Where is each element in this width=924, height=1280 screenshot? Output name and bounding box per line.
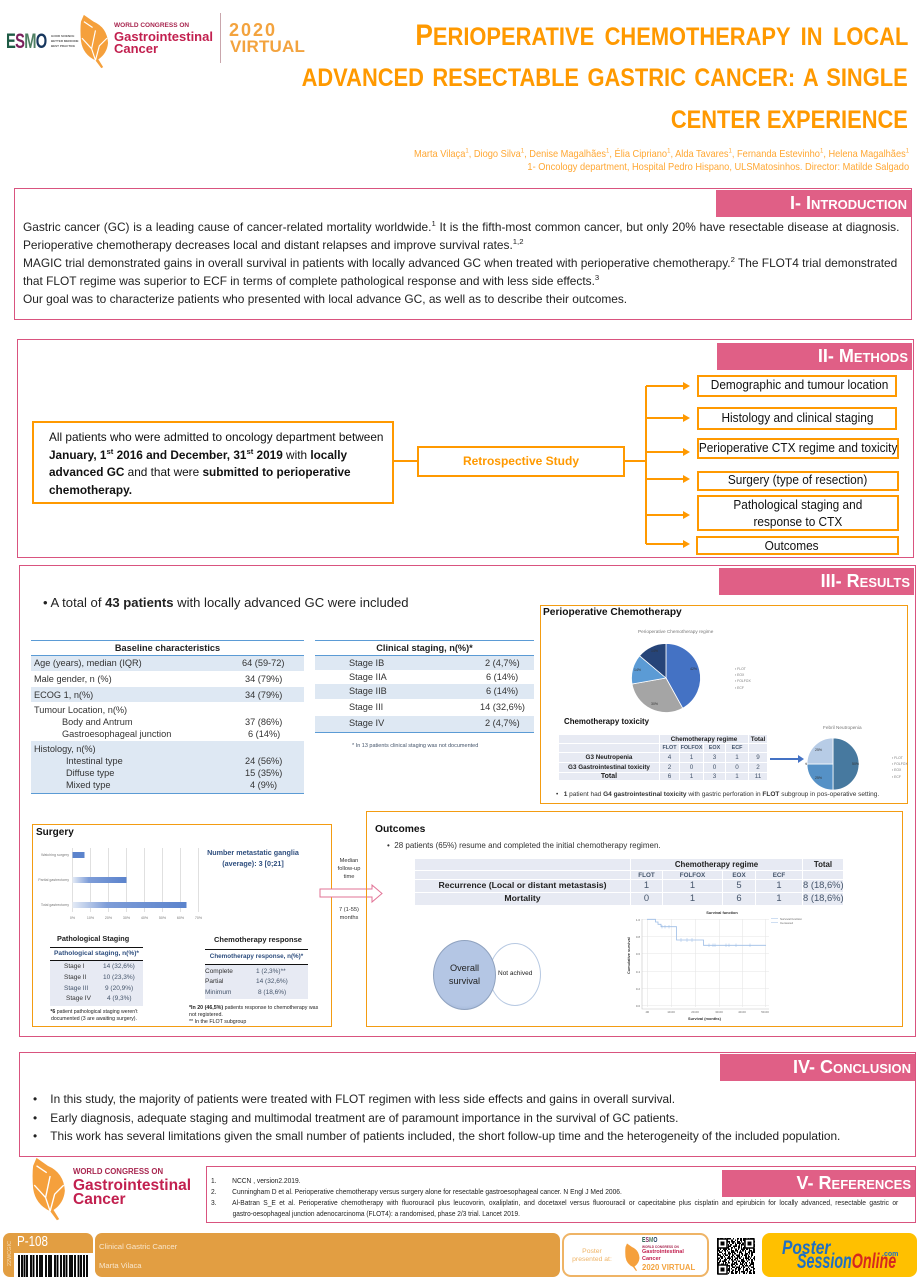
line chart: survival function: 1.0: [636, 918, 640, 922]
table: baseline characteristics: Baseline characteristics: [115, 643, 220, 653]
box: surgery: Surgery (type of resection): [728, 472, 868, 487]
table: outcomes by regime: Total: [814, 860, 832, 869]
footer: poster id and barcode: 22WCGIC: [7, 1241, 13, 1266]
logo: World Congress on Gastrointestinal Cancer: [80, 14, 213, 68]
text box: study population: January, 1st 2016 and December, 31st 2019 with locally: [49, 447, 347, 462]
table: outcomes by regime: [415, 859, 844, 905]
table: baseline characteristics: Histology, n(%): [34, 744, 96, 754]
legend: regime pie: [735, 667, 751, 690]
line chart: survival function: Survival function: [706, 910, 738, 915]
table: toxicity: 0: [713, 764, 716, 771]
table: toxicity: 0: [735, 764, 739, 771]
legend: regime pie: ▪ FLOT: [735, 667, 746, 671]
box: retrospective study: [417, 446, 625, 477]
arrow: surgery to outcomes: [320, 884, 383, 903]
table: baseline characteristics: 34 (79%): [245, 690, 282, 700]
pie chart: chemotherapy regime: 42%: [690, 667, 697, 671]
legend: regime pie: ▪ ECF: [735, 686, 744, 690]
table: baseline characteristics: Body and Antrum: [62, 717, 132, 727]
text: introduction: Perioperative chemotherapy decreases local and distant relapses and improve survival rates.1,2: [23, 237, 524, 252]
heading: results: III- Results: [821, 571, 910, 591]
text box: study population: [32, 421, 394, 504]
line chart: survival function: 50.00: [761, 1010, 769, 1014]
pie chart: chemotherapy regime: [632, 644, 700, 712]
table: toxicity: 4: [668, 754, 671, 761]
table: toxicity: ECF: [732, 745, 742, 751]
table: toxicity: Chemotherapy regime: [671, 736, 737, 743]
table: toxicity: G3 Gastrointestinal toxicity: [568, 764, 650, 771]
table: chemotherapy response: Partial: [205, 978, 223, 985]
logo: footer congress: Cancer: [73, 1191, 126, 1208]
footer: poster presented at: Cancer: [642, 1256, 661, 1262]
footer: PosterSessionOnline logo: .com: [882, 1251, 898, 1258]
footer: poster id and barcode: [3, 1233, 93, 1277]
logo: World Congress on Gastrointestinal Cancer: WORLD CONGRESS ON: [114, 22, 189, 29]
label: follow-up months: months: [340, 915, 358, 921]
bar chart: type of surgery: 30%: [123, 916, 131, 920]
heading: methods: [717, 343, 912, 370]
heading: references: V- References: [797, 1173, 911, 1193]
panel: outcomes: [366, 811, 903, 1027]
table: chemotherapy response: 14 (32,6%): [256, 978, 288, 985]
footer: poster presented at: ESMO: [642, 1237, 657, 1244]
box: retrospective study: Retrospective Study: [463, 454, 579, 468]
note: chemotherapy response: [189, 1005, 318, 1025]
panel: references: [206, 1166, 916, 1223]
bar chart: type of surgery: 20%: [105, 916, 113, 920]
table: toxicity: 2: [668, 764, 671, 771]
table: pathological staging: 10 (23,3%): [103, 974, 135, 981]
table: pathological staging: 4 (9,3%): [107, 995, 132, 1002]
table: pathological staging: 9 (20,9%): [105, 985, 133, 992]
legend: febrile neutropenia: ▪ FOLFOX: [892, 762, 908, 766]
table: toxicity: 3: [713, 754, 716, 761]
footer: poster id and barcode: P-108: [17, 1234, 48, 1250]
title: CENTER EXPERIENCE: [671, 106, 908, 134]
text: references list: [211, 1176, 898, 1218]
bar chart: type of surgery: Partial gastrectomy: [38, 878, 69, 882]
callout: metastatic ganglia: (average): 3 [0;21]: [222, 858, 284, 868]
footer: PosterSessionOnline logo: Poster: [782, 1238, 830, 1259]
authors and affiliation: [414, 148, 909, 172]
pie chart: chemotherapy regime: 30%: [651, 702, 658, 706]
table: baseline characteristics: 24 (56%): [245, 756, 282, 766]
chart title: regime pie: Perioperative Chemotherapy regime: [638, 629, 713, 634]
line chart: survival function: Cumulative survival: [626, 937, 631, 974]
logo: 2020 Virtual: 2020: [229, 20, 277, 40]
table: clinical staging: Stage IV: [349, 718, 384, 728]
table: toxicity: 9: [756, 754, 760, 761]
table: toxicity: 3: [713, 773, 716, 780]
title: [302, 19, 908, 134]
logo: ESMO: GOOD SCIENCE: [51, 34, 74, 38]
footer: category and author bar: Marta Vilaca: [99, 1261, 142, 1270]
line chart: survival function: 20.00: [691, 1010, 699, 1014]
pie chart: febrile neutropenia: 25%: [815, 748, 822, 752]
bar chart: type of surgery: 50%: [159, 916, 167, 920]
table: outcomes by regime: 1: [690, 892, 695, 903]
table: chemotherapy response: Complete: [205, 968, 233, 975]
box: CTX: Perioperative CTX regime and toxicity: [699, 440, 897, 455]
table: outcomes by regime: ECF: [773, 872, 785, 879]
text: references list: Al-Batran S_E et al. Perioperative chemotherapy with fluorouracil plus leucovorin, oxaliplatin, and docetaxel versus fluorouracil or capecitabine plus cisplatin and epirubicin for locally advanced, resectable gastric or: [232, 1198, 898, 1207]
callout: metastatic ganglia: [207, 848, 299, 868]
table: outcomes by regime: Chemotherapy regime: [675, 860, 758, 869]
legend: febrile neutropenia: ▪ EOX: [892, 768, 901, 772]
label: follow-up months: [339, 907, 359, 921]
line chart: survival function: 30.00: [715, 1010, 723, 1014]
diagram: overall survival: Not achived: [498, 970, 532, 977]
table: clinical staging: [315, 640, 534, 733]
authors and affiliation: 1- Oncology department, Hospital Pedro Hispano, ULSMatosinhos. Director: Matilde Salgado: [527, 162, 909, 172]
logo: ESMO: [6, 30, 79, 53]
heading: conclusion: IV- Conclusion: [793, 1057, 911, 1077]
pie chart: chemotherapy regime: 14%: [634, 668, 641, 672]
table: clinical staging: 6 (14%): [486, 686, 518, 696]
table: outcomes by regime: EOX: [732, 872, 746, 879]
label: median follow-up: time: [344, 874, 354, 880]
table: pathological staging: Stage I: [64, 963, 85, 970]
table: baseline characteristics: [31, 640, 304, 794]
footer: category and author bar: Clinical Gastric Cancer: [99, 1242, 177, 1251]
heading: outcomes: Outcomes: [375, 824, 425, 835]
bar chart: type of surgery: Watching surgery: [41, 853, 69, 857]
text: conclusion bullets: • Early diagnosis, adequate staging and multimodal treatment are of paramount importance in the survival of GC patients.: [33, 1111, 678, 1125]
footer: poster presented at: WORLD CONGRESS ON: [642, 1245, 679, 1249]
note: clinical staging: * In 13 patients clinical staging was not documented: [352, 743, 478, 749]
line chart: survival function: 0.4: [636, 970, 640, 974]
logo: World Congress on Gastrointestinal Cancer: Cancer: [114, 41, 158, 56]
table: clinical staging: 2 (4,7%): [485, 658, 520, 668]
footer: QR code: [717, 1238, 755, 1275]
text: conclusion bullets: • This work has several limitations given the small number of patients included, the short follow-up time and the heterogeneity of the included population.: [33, 1129, 840, 1143]
panel: methods: [17, 339, 914, 558]
table: chemotherapy response: 8 (18,6%): [258, 989, 286, 996]
table: toxicity: 1: [735, 754, 739, 761]
logo: 2020 Virtual: [220, 13, 305, 63]
table: clinical staging: Stage III: [349, 702, 383, 712]
footer: category and author bar: [95, 1233, 560, 1277]
heading: references: [722, 1170, 915, 1197]
legend: febrile neutropenia: [892, 756, 908, 779]
pie chart: febrile neutropenia: 25%: [815, 776, 822, 780]
table: chemotherapy response: Minimum: [205, 989, 231, 996]
box: histology: [697, 407, 897, 430]
callout: metastatic ganglia: Number metastatic ganglia: [207, 848, 299, 857]
logo: footer congress: WORLD CONGRESS ON: [73, 1167, 163, 1176]
table: baseline characteristics: Intestinal type: [66, 756, 123, 766]
diagram: overall survival: [433, 940, 541, 1010]
heading: chemotherapy toxicity: Chemotherapy toxicity: [564, 717, 649, 726]
table: outcomes by regime: 6: [736, 892, 742, 903]
panel: surgery: [32, 824, 332, 1027]
text box: study population: chemotherapy.: [49, 483, 132, 497]
table: outcomes by regime: 1: [776, 879, 782, 890]
table: outcomes by regime: 8 (18,6%): [803, 892, 844, 903]
text: completed regimen: • 28 patients (65%) resume and completed the initial chemotherapy regimen.: [387, 841, 661, 850]
table: baseline characteristics: ECOG 1, n(%): [34, 690, 93, 700]
table: outcomes by regime: FOLFOX: [680, 872, 705, 879]
table: toxicity: 1: [735, 773, 739, 780]
logo: World Congress on Gastrointestinal Cancer: Gastrointestinal: [114, 29, 213, 44]
text: references list: Cunningham D et al. Perioperative chemotherapy versus surgery alone for resectable gastroesophageal cancer. N Engl J Med 2006.: [232, 1187, 622, 1196]
box: surgery: [697, 471, 899, 491]
line chart: survival function: 40.00: [738, 1010, 746, 1014]
footer: PosterSessionOnline logo: [762, 1233, 917, 1277]
box: demographic: [697, 375, 897, 397]
legend: regime pie: ▪ FOLFOX: [735, 679, 751, 683]
table: baseline characteristics: 37 (86%): [245, 717, 282, 727]
text: references list: 2.: [211, 1187, 217, 1196]
text: introduction: that FLOT regime was superior to ECF in terms of complete pathological response and with less side effects.3: [23, 273, 599, 288]
line chart: survival function: Censored: [780, 921, 793, 925]
text: introduction: MAGIC trial demonstrated gains in overall survival in patients with locally advanced GC when treated with perioperative chemotherapy.2 The FLOT4 trial demonstrated: [23, 255, 897, 270]
line chart: survival function: [626, 910, 802, 1021]
heading: perioperative chemotherapy: Perioperative Chemotherapy: [543, 607, 682, 618]
chart title: febrile neutropenia: Febril Neutropenia: [823, 725, 862, 730]
connectors: methods flow: [394, 382, 690, 548]
note: chemotherapy response: not registered.: [189, 1012, 223, 1018]
note: chemotherapy response: *In 20 (46,5%) patients response to chemotherapy was: [189, 1005, 318, 1011]
table: pathological staging: 14 (32,6%): [103, 963, 135, 970]
table: clinical staging: 6 (14%): [486, 672, 518, 682]
heading: introduction: I- Introduction: [790, 193, 907, 213]
legend: regime pie: ▪ EOX: [735, 673, 744, 677]
label: follow-up months: 7 (1-55): [339, 907, 359, 913]
table: toxicity: G3 Neutropenia: [586, 754, 632, 761]
table: clinical staging: Clinical staging, n(%)*: [376, 643, 473, 653]
logo: footer congress: [32, 1158, 191, 1220]
title: PERIOPERATIVE CHEMOTHERAPY IN LOCAL: [415, 19, 908, 52]
table: clinical staging: Stage IIB: [349, 686, 387, 696]
table: toxicity: 1: [690, 773, 693, 780]
box: pathological staging: response to CTX: [754, 514, 842, 529]
text: conclusion bullets: • In this study, the majority of patients were treated with FLOT regimen with less side effects and gains in overall survival.: [33, 1092, 675, 1106]
label: median follow-up: follow-up: [338, 866, 360, 872]
table: chemotherapy response: 1 (2,3%)**: [256, 968, 286, 975]
arrow: toxicity to pie: [770, 755, 804, 763]
table: baseline characteristics: Age (years), median (IQR): [34, 658, 142, 668]
logo: ESMO: BEST PRACTICE: [51, 44, 75, 48]
table: outcomes by regime: FLOT: [638, 872, 655, 879]
table: clinical staging: 2 (4,7%): [485, 718, 520, 728]
table: baseline characteristics: 34 (79%): [245, 674, 282, 684]
title: ADVANCED RESECTABLE GASTRIC CANCER: A SINGLE: [302, 64, 908, 92]
text box: study population: advanced GC and that were submitted to perioperative: [49, 465, 351, 479]
table: baseline characteristics: 6 (14%): [248, 729, 280, 739]
panel: conclusion: [19, 1052, 916, 1157]
footer: poster presented at: [562, 1233, 709, 1277]
table: baseline characteristics: Tumour Location, n(%): [34, 705, 127, 715]
box: outcomes: [696, 536, 899, 555]
text box: study population: All patients who were admitted to oncology department between: [49, 430, 383, 444]
table: baseline characteristics: Diffuse type: [66, 768, 114, 778]
table: outcomes by regime: 1: [776, 892, 782, 903]
table: outcomes by regime: 8 (18,6%): [803, 879, 844, 890]
bar chart: type of surgery: Total gastrectomy: [41, 903, 69, 907]
bar chart: type of surgery: 70%: [195, 916, 203, 920]
table: pathological staging: Stage III: [64, 985, 88, 992]
diagram: overall survival: Overall: [450, 963, 479, 973]
legend: febrile neutropenia: ▪ ECF: [892, 775, 901, 779]
footer: poster presented at: Poster: [582, 1248, 602, 1255]
label: median follow-up: [338, 858, 360, 880]
table: chemotherapy response: Chemotherapy response, n(%)*: [210, 953, 303, 960]
box: demographic: Demographic and tumour location: [711, 377, 888, 392]
table: pathological staging: Pathological staging, n(%)*: [54, 950, 139, 957]
text: total patients: • A total of 43 patients with locally advanced GC were included: [43, 595, 409, 610]
table: toxicity: 0: [690, 764, 693, 771]
line chart: survival function: 0.8: [636, 935, 640, 939]
heading: conclusion: [720, 1054, 915, 1081]
table: outcomes by regime: Recurrence (Local or distant metastasis): [438, 880, 606, 890]
table: baseline characteristics: Gastroesophageal junction: [62, 729, 171, 739]
text: introduction: Our goal was to characterize patients who presented with local advance GC, as well as to describe their outcomes.: [23, 292, 627, 306]
logo: 2020 Virtual: VIRTUAL: [230, 37, 305, 56]
table: toxicity: 6: [668, 773, 671, 780]
footer: poster presented at: Gastrointestinal: [642, 1249, 684, 1255]
table: baseline characteristics: Male gender, n (%): [34, 674, 112, 684]
box: outcomes: Outcomes: [765, 538, 819, 553]
text: references list: 1.: [211, 1176, 217, 1185]
table: toxicity: Total: [751, 736, 765, 743]
text: references list: 3.: [211, 1198, 217, 1207]
authors and affiliation: Marta Vilaça1, Diogo Silva1, Denise Magalhães1, Élia Cipriano1, Alda Tavares1, Fernanda Estevinho1, Helena Magalhães1: [414, 148, 909, 160]
legend: febrile neutropenia: ▪ FLOT: [892, 756, 903, 760]
footer: PosterSessionOnline logo: SessionOnline: [797, 1250, 896, 1273]
bar chart: type of surgery: 10%: [87, 916, 95, 920]
table: toxicity: EOX: [709, 745, 720, 751]
logo: ESMO: BETTER MEDICINE: [51, 39, 79, 43]
footer: poster presented at: 2020 VIRTUAL: [642, 1263, 695, 1272]
box: histology: Histology and clinical staging: [721, 410, 873, 425]
heading: results: [719, 568, 914, 595]
note: G4 toxicity: • 1 patient had G4 gastrointestinal toxicity with gastric perforation in FLOT subgroup in pos-operative setting.: [556, 791, 879, 798]
table: pathological staging: Stage IV: [66, 995, 91, 1002]
text: references list: NCCN , version2.2019.: [232, 1176, 301, 1185]
table: outcomes by regime: 5: [736, 879, 742, 890]
table: pathological staging: [50, 947, 143, 1006]
table: clinical staging: Stage IB: [349, 658, 384, 668]
line chart: survival function: Survival function: [780, 917, 802, 921]
line chart: survival function: 0.0: [636, 1004, 640, 1008]
line chart: survival function: 10.00: [667, 1010, 675, 1014]
heading: chemotherapy response: Chemotherapy response: [214, 935, 302, 944]
heading: surgery: Surgery: [36, 827, 74, 838]
note: chemotherapy response: ** In the FLOT subgroup: [189, 1019, 246, 1025]
table: toxicity: 1: [690, 754, 693, 761]
text: references list: gastro-oesophageal junction adenocarcinoma (FLOT4): a randomised, phase 2/3 trial. Lancet 2019.: [232, 1209, 520, 1218]
table: baseline characteristics: 15 (35%): [245, 768, 282, 778]
table: clinical staging: 14 (32,6%): [480, 702, 525, 712]
heading: pathological staging: Pathological Staging: [57, 934, 129, 943]
table: outcomes by regime: 1: [644, 879, 649, 890]
bar chart: type of surgery: [38, 848, 203, 920]
table: baseline characteristics: Mixed type: [66, 780, 110, 790]
table: toxicity: 2: [756, 764, 760, 771]
diagram: overall survival: survival: [449, 976, 480, 986]
box: pathological staging: [697, 495, 899, 531]
text: introduction: [23, 219, 899, 306]
panel: perioperative chemotherapy: [540, 605, 908, 804]
note: pathological staging: [50, 1009, 138, 1022]
table: clinical staging: Stage IIA: [349, 672, 387, 682]
box: pathological staging: Pathological staging and: [734, 497, 862, 512]
label: median follow-up: Median: [340, 858, 358, 864]
table: outcomes by regime: 0: [644, 892, 649, 903]
pie chart: febrile neutropenia: [805, 738, 859, 790]
heading: methods: II- Methods: [818, 346, 908, 366]
line chart: survival function: 0.2: [636, 987, 640, 991]
table: pathological staging: Stage II: [64, 974, 86, 981]
logo: ESMO: ESMO: [6, 30, 47, 53]
bar chart: type of surgery: 60%: [177, 916, 185, 920]
footer: poster presented at: presented at:: [572, 1256, 612, 1263]
table: baseline characteristics: 4 (9%): [250, 780, 277, 790]
table: outcomes by regime: 1: [690, 879, 695, 890]
table: baseline characteristics: 64 (59-72): [242, 658, 284, 668]
table: chemotherapy response: [205, 949, 308, 999]
note: pathological staging: *6 patient pathological staging weren't: [50, 1009, 138, 1015]
bar chart: type of surgery: 40%: [141, 916, 149, 920]
line chart: survival function: 0.6: [636, 952, 640, 956]
pie chart: chemotherapy regime: 14%: [651, 649, 658, 653]
table: toxicity: FOLFOX: [681, 745, 702, 751]
line chart: survival function: Survival (months): [688, 1016, 722, 1021]
panel: introduction: [14, 188, 912, 320]
text: conclusion bullets: [33, 1092, 840, 1143]
bar chart: type of surgery: 0%: [70, 916, 76, 920]
line chart: survival function: .00: [645, 1010, 649, 1014]
table: outcomes by regime: Mortality: [504, 893, 541, 903]
table: toxicity: 11: [755, 773, 761, 780]
table: toxicity: [559, 735, 767, 780]
panel: results: [19, 565, 916, 1037]
note: pathological staging: documented (3 are awaiting surgery).: [51, 1016, 137, 1022]
text: introduction: Gastric cancer (GC) is a leading cause of cancer-related mortality worldwide.1 It is the fifth-most common cancer, but only 20% have resectable disease at diagnosis.: [23, 219, 899, 234]
pie chart: febrile neutropenia: 50%: [852, 762, 859, 766]
table: toxicity: Total: [601, 773, 617, 780]
table: toxicity: FLOT: [662, 745, 677, 751]
heading: introduction: [716, 190, 911, 217]
logo: footer congress: Gastrointestinal: [73, 1177, 191, 1194]
